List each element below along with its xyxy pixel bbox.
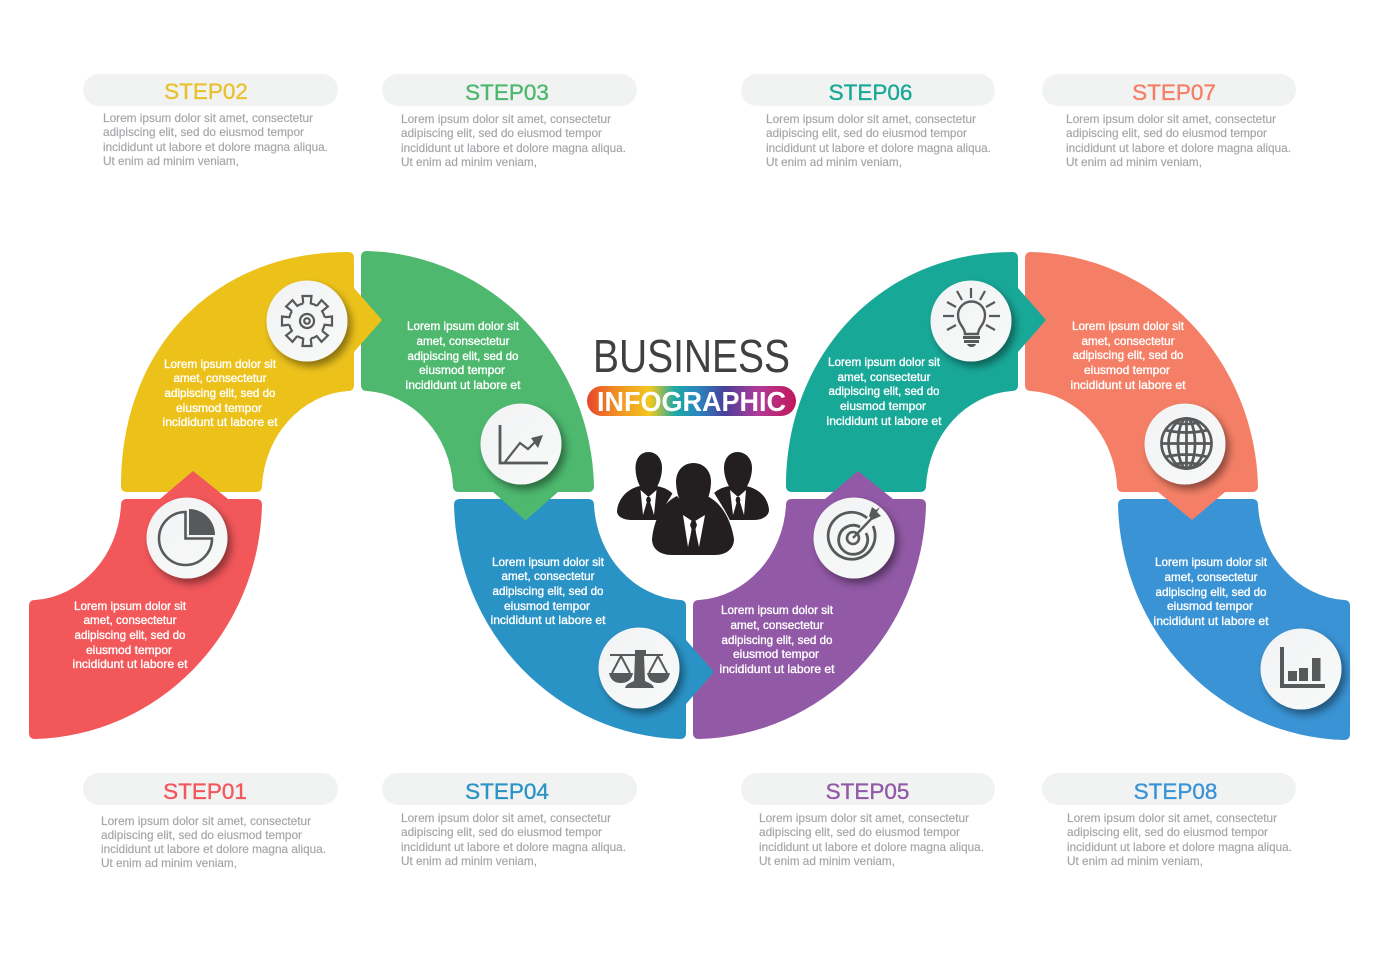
text block: step 5 [720, 603, 835, 676]
pill: STEP04 [382, 773, 637, 805]
shape: step 3 band with down arrow [361, 251, 594, 520]
text block: step 7: eiusmod tempor [1084, 363, 1170, 377]
icon: gear [266, 280, 348, 362]
panel: step 1 red segment [29, 471, 262, 739]
panel: step 7 orange segment [1025, 252, 1258, 520]
text block: step 2: adipiscing elit, sed do [164, 386, 276, 400]
text block: step 6: Lorem ipsum dolor sit [828, 355, 941, 369]
pill: STEP06 [741, 74, 995, 106]
text block: step 2: eiusmod tempor [176, 401, 262, 415]
pill: STEP05 [741, 773, 995, 805]
icon: balance scales [598, 628, 680, 708]
icon: business people [617, 452, 769, 558]
text block: STEP06 description: Lorem ipsum dolor sit amet, consectetur [766, 112, 976, 126]
heading: STEP08: STEP08 [1134, 779, 1217, 804]
text block: STEP05 description: Ut enim ad minim veniam, [759, 854, 895, 868]
text block: step 4: adipiscing elit, sed do [492, 584, 604, 598]
text block: STEP08 description: Lorem ipsum dolor sit amet, consectetur [1067, 811, 1277, 825]
text block: STEP01 description: incididunt ut labore et dolore magna aliqua. [101, 842, 326, 856]
text block: step 4: eiusmod tempor [504, 599, 590, 613]
icon: target with arrow [814, 498, 894, 578]
text block: STEP01 description [101, 814, 326, 870]
text block: step 7: Lorem ipsum dolor sit [1072, 319, 1185, 333]
text block: step 7 [1070, 319, 1186, 392]
footer card: STEP01 [83, 773, 338, 870]
text block: step 8: Lorem ipsum dolor sit [1155, 555, 1268, 569]
pill: STEP08 [1042, 773, 1296, 805]
text block: STEP02 description: Ut enim ad minim veniam, [103, 154, 239, 168]
text block: STEP04 description: incididunt ut labore et dolore magna aliqua. [401, 840, 626, 854]
panel: step 6 teal segment [786, 252, 1046, 492]
text block: STEP07 description: incididunt ut labore et dolore magna aliqua. [1066, 141, 1291, 155]
text block: STEP04 description: adipiscing elit, sed do eiusmod tempor [401, 825, 602, 839]
heading: STEP04: STEP04 [465, 779, 549, 804]
text block: STEP05 description: incididunt ut labore et dolore magna aliqua. [759, 840, 984, 854]
text block: STEP08 description: Ut enim ad minim veniam, [1067, 854, 1203, 868]
text block: step 5: amet, consectetur [730, 618, 824, 632]
text block: step 5: eiusmod tempor [733, 647, 819, 661]
text block: step 8: adipiscing elit, sed do [1156, 585, 1267, 599]
text block: STEP01 description: adipiscing elit, sed do eiusmod tempor [101, 828, 302, 842]
text block: STEP08 description: adipiscing elit, sed do eiusmod tempor [1067, 825, 1268, 839]
text block: STEP04 description: Ut enim ad minim veniam, [401, 854, 537, 868]
text block: step 6: adipiscing elit, sed do [828, 384, 940, 398]
text block: step 6: incididunt ut labore et [826, 414, 942, 428]
text block: STEP02 description: Lorem ipsum dolor sit amet, consectetur [103, 111, 313, 125]
text block: STEP02 description: adipiscing elit, sed do eiusmod tempor [103, 125, 304, 139]
shape: step 2 band with right arrow [121, 252, 382, 492]
text block: step 4: incididunt ut labore et [490, 613, 606, 627]
text block: step 1 [72, 599, 188, 671]
text block: step 1: adipiscing elit, sed do [74, 628, 186, 642]
footer card: STEP04 [382, 773, 637, 868]
figure: right person [704, 452, 769, 520]
text block: step 3: eiusmod tempor [419, 363, 505, 377]
text block: step 3 [406, 319, 521, 392]
text block: STEP04 description: Lorem ipsum dolor sit amet, consectetur [401, 811, 611, 825]
shape: step 5 band with up arrow [693, 471, 926, 739]
text block: STEP07 description: Lorem ipsum dolor sit amet, consectetur [1066, 112, 1276, 126]
text block: step 5: adipiscing elit, sed do [722, 633, 833, 647]
text block: step 3: incididunt ut labore et [406, 378, 521, 392]
text block: STEP05 description: Lorem ipsum dolor sit amet, consectetur [759, 811, 969, 825]
heading: STEP02: STEP02 [164, 79, 248, 104]
heading: STEP07: STEP07 [1132, 80, 1216, 105]
text block: step 5: Lorem ipsum dolor sit [721, 603, 834, 617]
text block: step 8 [1154, 555, 1269, 628]
text block: step 5: incididunt ut labore et [720, 662, 835, 676]
shape: step 4 band with right arrow [454, 499, 714, 739]
panel: step 2 yellow segment [121, 252, 382, 492]
shape: step 6 band with right arrow [786, 252, 1046, 492]
text block: STEP07 description: Ut enim ad minim veniam, [1066, 155, 1202, 169]
text block: step 1: eiusmod tempor [86, 643, 172, 657]
heading: STEP06: STEP06 [829, 80, 912, 105]
text block: STEP03 description: adipiscing elit, sed do eiusmod tempor [401, 126, 602, 140]
text block: step 6: eiusmod tempor [840, 399, 926, 413]
text block: STEP08 description [1067, 811, 1292, 868]
text block: STEP06 description: adipiscing elit, sed do eiusmod tempor [766, 126, 967, 140]
text block: STEP02 description: incididunt ut labore et dolore magna aliqua. [103, 140, 328, 154]
shape: step 7 band with down arrow [1025, 252, 1258, 520]
text block: STEP01 description: Ut enim ad minim veniam, [101, 856, 237, 870]
panel: step 4 blue segment [454, 499, 714, 739]
text block: step 1: incididunt ut labore et [72, 657, 188, 671]
text block: step 8: incididunt ut labore et [1154, 614, 1269, 628]
header card: STEP02 [83, 74, 338, 168]
icon: pie chart [146, 498, 228, 578]
icon: bar chart [1260, 628, 1342, 710]
text block: STEP03 description: Ut enim ad minim veniam, [401, 155, 537, 169]
text block: step 3: Lorem ipsum dolor sit [407, 319, 520, 333]
panel: step 3 green segment [361, 251, 594, 520]
text block: step 1: Lorem ipsum dolor sit [74, 599, 187, 613]
heading: STEP03: STEP03 [465, 80, 549, 105]
text block: STEP07 description [1066, 112, 1291, 169]
text block: STEP06 description: Ut enim ad minim veniam, [766, 155, 902, 169]
text block: STEP08 description: incididunt ut labore et dolore magna aliqua. [1067, 840, 1292, 854]
text block: step 2: amet, consectetur [174, 371, 266, 385]
text block: step 6: amet, consectetur [838, 370, 930, 384]
icon: line chart with arrow [480, 404, 562, 484]
text block: step 8: amet, consectetur [1164, 570, 1258, 584]
text block: step 4: amet, consectetur [502, 569, 594, 583]
text block: STEP03 description: Lorem ipsum dolor sit amet, consectetur [401, 112, 611, 126]
text block: STEP07 description: adipiscing elit, sed do eiusmod tempor [1066, 126, 1267, 140]
header card: STEP07 [1042, 74, 1296, 169]
text block: STEP03 description [401, 112, 626, 169]
icon: globe [1144, 404, 1226, 484]
panel: step 5 purple segment [693, 471, 926, 739]
text block: step 8: eiusmod tempor [1167, 599, 1253, 613]
text block: step 3: amet, consectetur [416, 334, 510, 348]
text block: STEP05 description [759, 811, 984, 868]
footer card: STEP05 [741, 773, 995, 868]
text block: step 2: incididunt ut labore et [162, 415, 278, 429]
text block: STEP05 description: adipiscing elit, sed do eiusmod tempor [759, 825, 960, 839]
header card: STEP03 [382, 74, 637, 169]
text block: step 4: Lorem ipsum dolor sit [492, 555, 605, 569]
pill: STEP01 [83, 773, 338, 805]
text block: STEP04 description [401, 811, 626, 868]
figure: left person [617, 452, 682, 520]
pill: STEP03 [382, 74, 637, 106]
shape: step 1 band with up arrow [29, 471, 262, 739]
shape: step 8 band [1118, 499, 1350, 740]
text block: STEP06 description [766, 112, 991, 169]
text block: STEP01 description: Lorem ipsum dolor sit amet, consectetur [101, 814, 311, 828]
text block: STEP03 description: incididunt ut labore et dolore magna aliqua. [401, 141, 626, 155]
title: BUSINESS: BUSINESS [593, 330, 790, 382]
text block: step 6 [826, 355, 942, 428]
pill: STEP07 [1042, 74, 1296, 106]
text block: step 7: incididunt ut labore et [1070, 378, 1186, 392]
heading: STEP01: STEP01 [163, 779, 247, 804]
figure: centre person [650, 463, 737, 558]
panel: step 8 blue segment [1118, 499, 1350, 740]
text block: step 1: amet, consectetur [84, 613, 176, 627]
text block: step 3: adipiscing elit, sed do [408, 349, 519, 363]
text block: STEP06 description: incididunt ut labore et dolore magna aliqua. [766, 141, 991, 155]
text block: step 7: amet, consectetur [1082, 334, 1174, 348]
banner: INFOGRAPHIC: INFOGRAPHIC [597, 386, 786, 417]
icon: light bulb [930, 280, 1012, 362]
footer card: STEP08 [1042, 773, 1296, 868]
text block: step 2: Lorem ipsum dolor sit [164, 357, 277, 371]
pill: STEP02 [83, 74, 338, 106]
text block: step 4 [490, 555, 606, 627]
header card: STEP06 [741, 74, 995, 169]
text block: step 7: adipiscing elit, sed do [1072, 348, 1184, 362]
text block: step 2 [162, 357, 278, 429]
heading: STEP05: STEP05 [826, 779, 909, 804]
text block: STEP02 description [103, 111, 328, 168]
